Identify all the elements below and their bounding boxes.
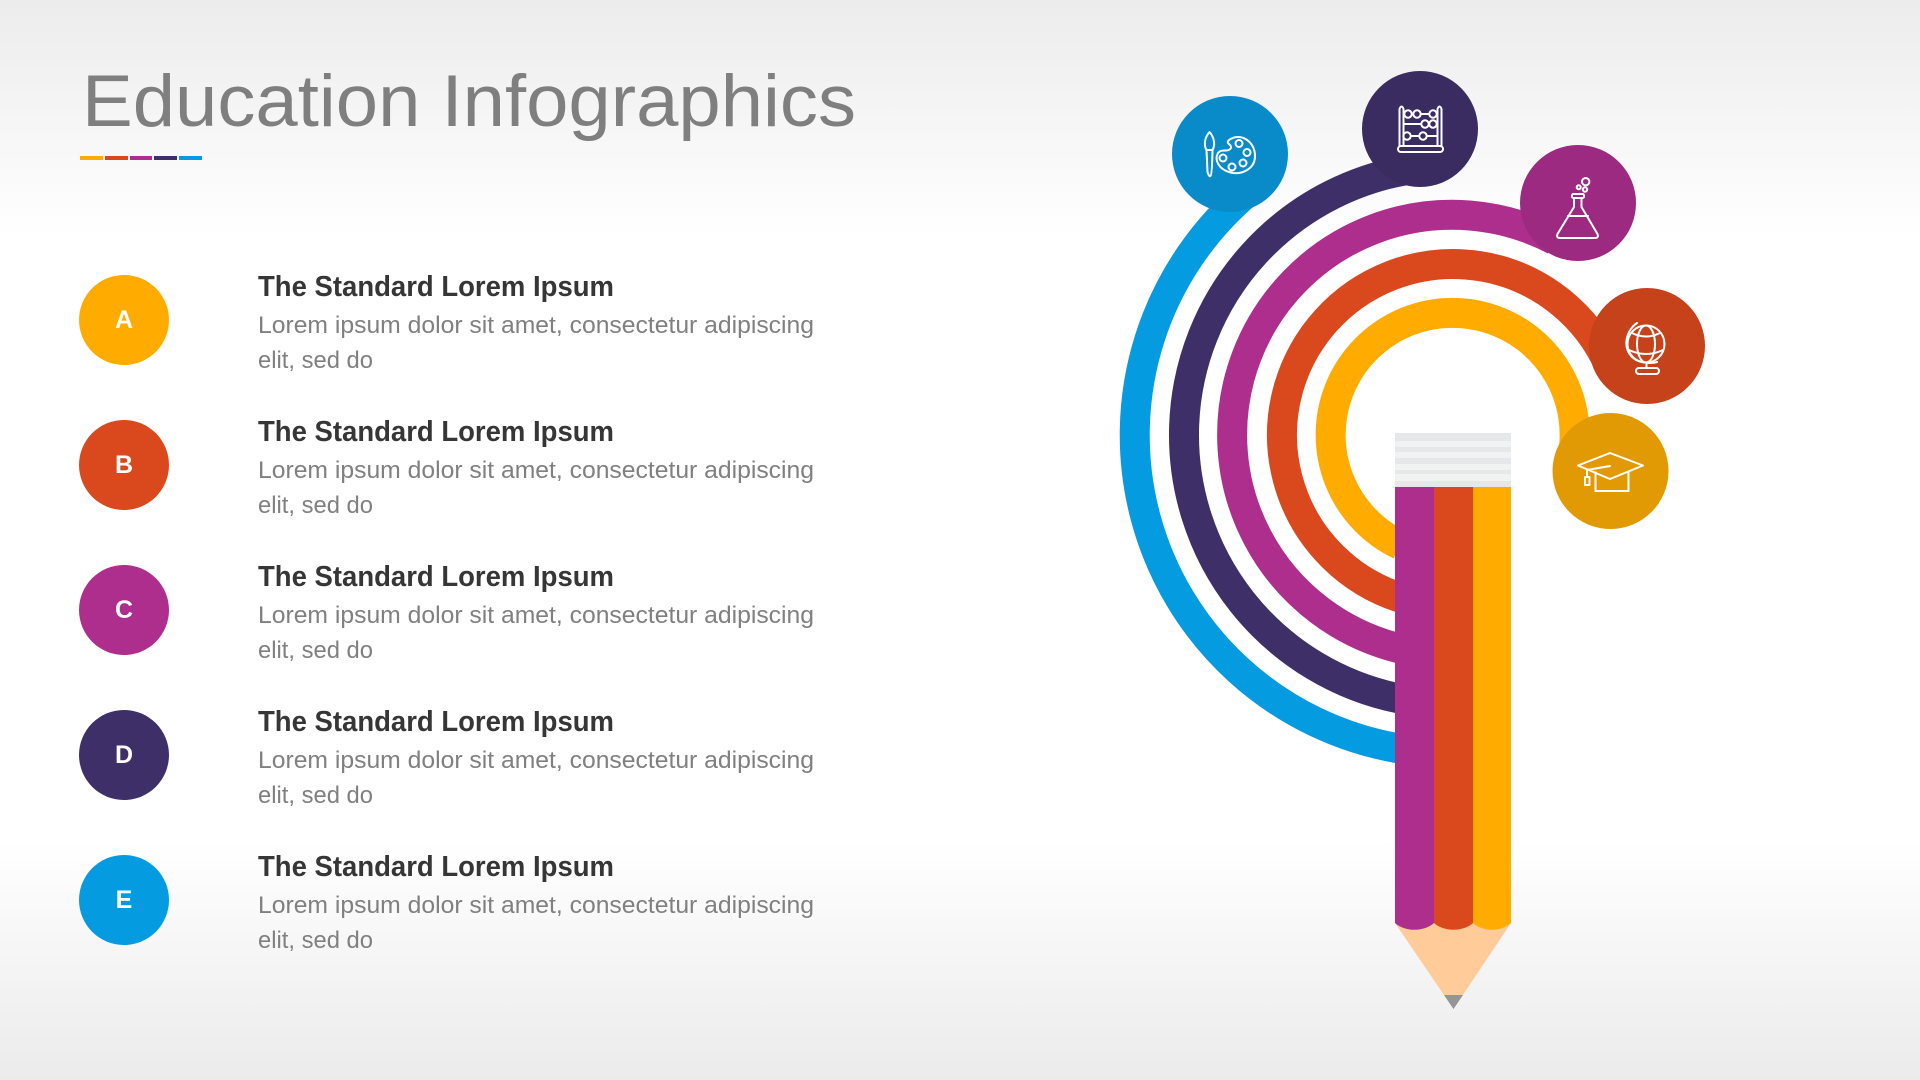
title: Education Infographics [82,61,856,142]
title underline [80,156,202,160]
list item E [79,851,814,954]
list item C: C [115,596,133,624]
list item C: elit, sed do [258,637,373,664]
list item E: elit, sed do [258,927,373,954]
pencil eraser [1395,433,1511,487]
list item D [79,706,814,809]
pencil stripe yellow [1473,487,1511,930]
list item D: D [115,741,133,769]
list item D: Lorem ipsum dolor sit amet, consectetur adipiscing [258,747,814,774]
list item C: Lorem ipsum dolor sit amet, consectetur adipiscing [258,602,814,629]
list item B [79,416,814,519]
pencil [1395,433,1511,1009]
arc: magenta [1232,215,1555,648]
icon circle: flask [1520,145,1636,261]
list item B: Lorem ipsum dolor sit amet, consectetur adipiscing [258,457,814,484]
pencil stripe orange [1434,487,1473,930]
list item A: The Standard Lorem Ipsum [258,271,614,303]
icon circle: graduation cap [1552,413,1668,529]
pencil lead [1444,995,1463,1009]
list item B: The Standard Lorem Ipsum [258,416,614,448]
pencil stripe magenta [1395,487,1434,930]
pencil tip wood [1395,923,1511,1009]
list item B: elit, sed do [258,492,373,519]
list item A: Lorem ipsum dolor sit amet, consectetur adipiscing [258,312,814,339]
list item C [79,561,814,664]
list item A [79,271,814,374]
list item D: The Standard Lorem Ipsum [258,706,614,738]
list item C: The Standard Lorem Ipsum [258,561,614,593]
list item D: elit, sed do [258,782,373,809]
icon circle: palette [1172,96,1288,212]
icon circle: globe [1589,288,1705,404]
list item E: Lorem ipsum dolor sit amet, consectetur adipiscing [258,892,814,919]
list item E: The Standard Lorem Ipsum [258,851,614,883]
arc: orange [1282,264,1609,598]
arc: navy [1184,168,1420,699]
list item A: elit, sed do [258,347,373,374]
list item E: E [116,886,132,914]
list item A: A [115,306,133,334]
arc: yellow [1331,313,1575,545]
icon circle: abacus [1362,71,1478,187]
arc: blue [1135,190,1400,749]
list item B: B [115,451,133,479]
